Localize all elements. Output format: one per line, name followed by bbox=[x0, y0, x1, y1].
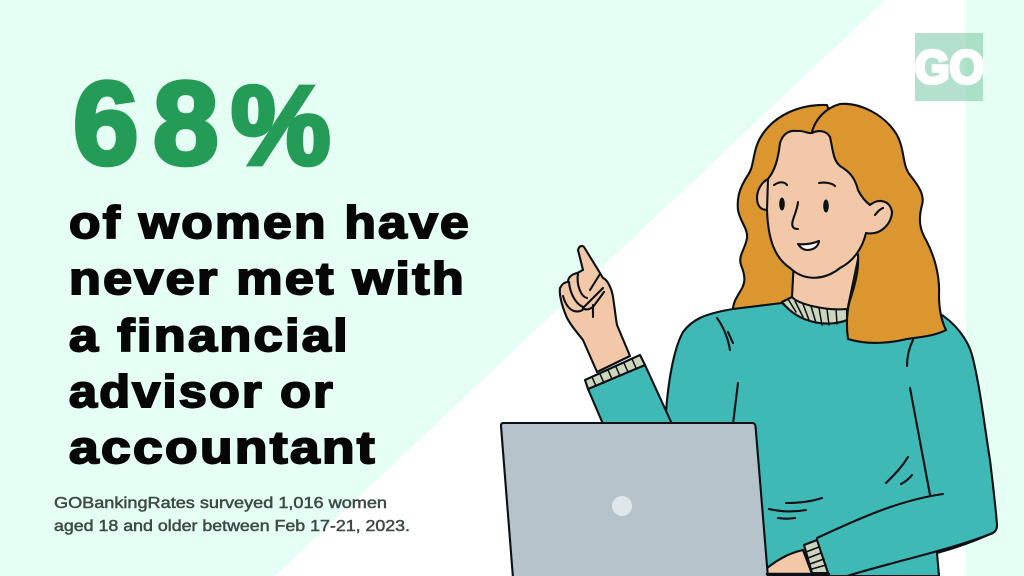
survey source note: aged 18 and older between Feb 17-21, 2023. bbox=[54, 518, 410, 535]
sweater bbox=[640, 303, 997, 576]
laptop bbox=[501, 423, 768, 576]
left ear bbox=[757, 179, 768, 210]
raised hand bbox=[560, 246, 630, 372]
logo: GO: GO bbox=[915, 41, 984, 93]
neck bbox=[792, 240, 862, 320]
raised cuff bbox=[585, 355, 645, 389]
body statement: accountant bbox=[69, 422, 377, 473]
eyes bbox=[779, 198, 785, 210]
body statement: of women have bbox=[69, 197, 471, 248]
lower hand bbox=[767, 550, 812, 574]
hair: right side bbox=[812, 104, 946, 343]
lower cuff bbox=[804, 540, 828, 573]
body statement: a financial bbox=[69, 310, 350, 361]
hand finger lines bbox=[563, 273, 604, 317]
laptop logo dot bbox=[612, 496, 632, 516]
headline statistic: 68 bbox=[73, 58, 219, 190]
eyebrows, nose and ear crease bbox=[774, 182, 883, 229]
headline statistic: % bbox=[231, 63, 331, 188]
survey source note bbox=[54, 495, 410, 535]
survey source note: GOBankingRates surveyed 1,016 women bbox=[54, 495, 387, 512]
sweater forearm and fold lines bbox=[717, 318, 993, 576]
raised sleeve bbox=[588, 365, 672, 424]
body statement: never met with bbox=[69, 253, 466, 304]
hair: left side bbox=[733, 105, 860, 320]
face bbox=[757, 131, 892, 278]
body statement bbox=[69, 197, 471, 473]
illustration: woman pointing with laptop bbox=[501, 104, 997, 576]
mouth bbox=[798, 241, 819, 250]
body statement: advisor or bbox=[69, 366, 335, 417]
collar bbox=[782, 297, 847, 325]
